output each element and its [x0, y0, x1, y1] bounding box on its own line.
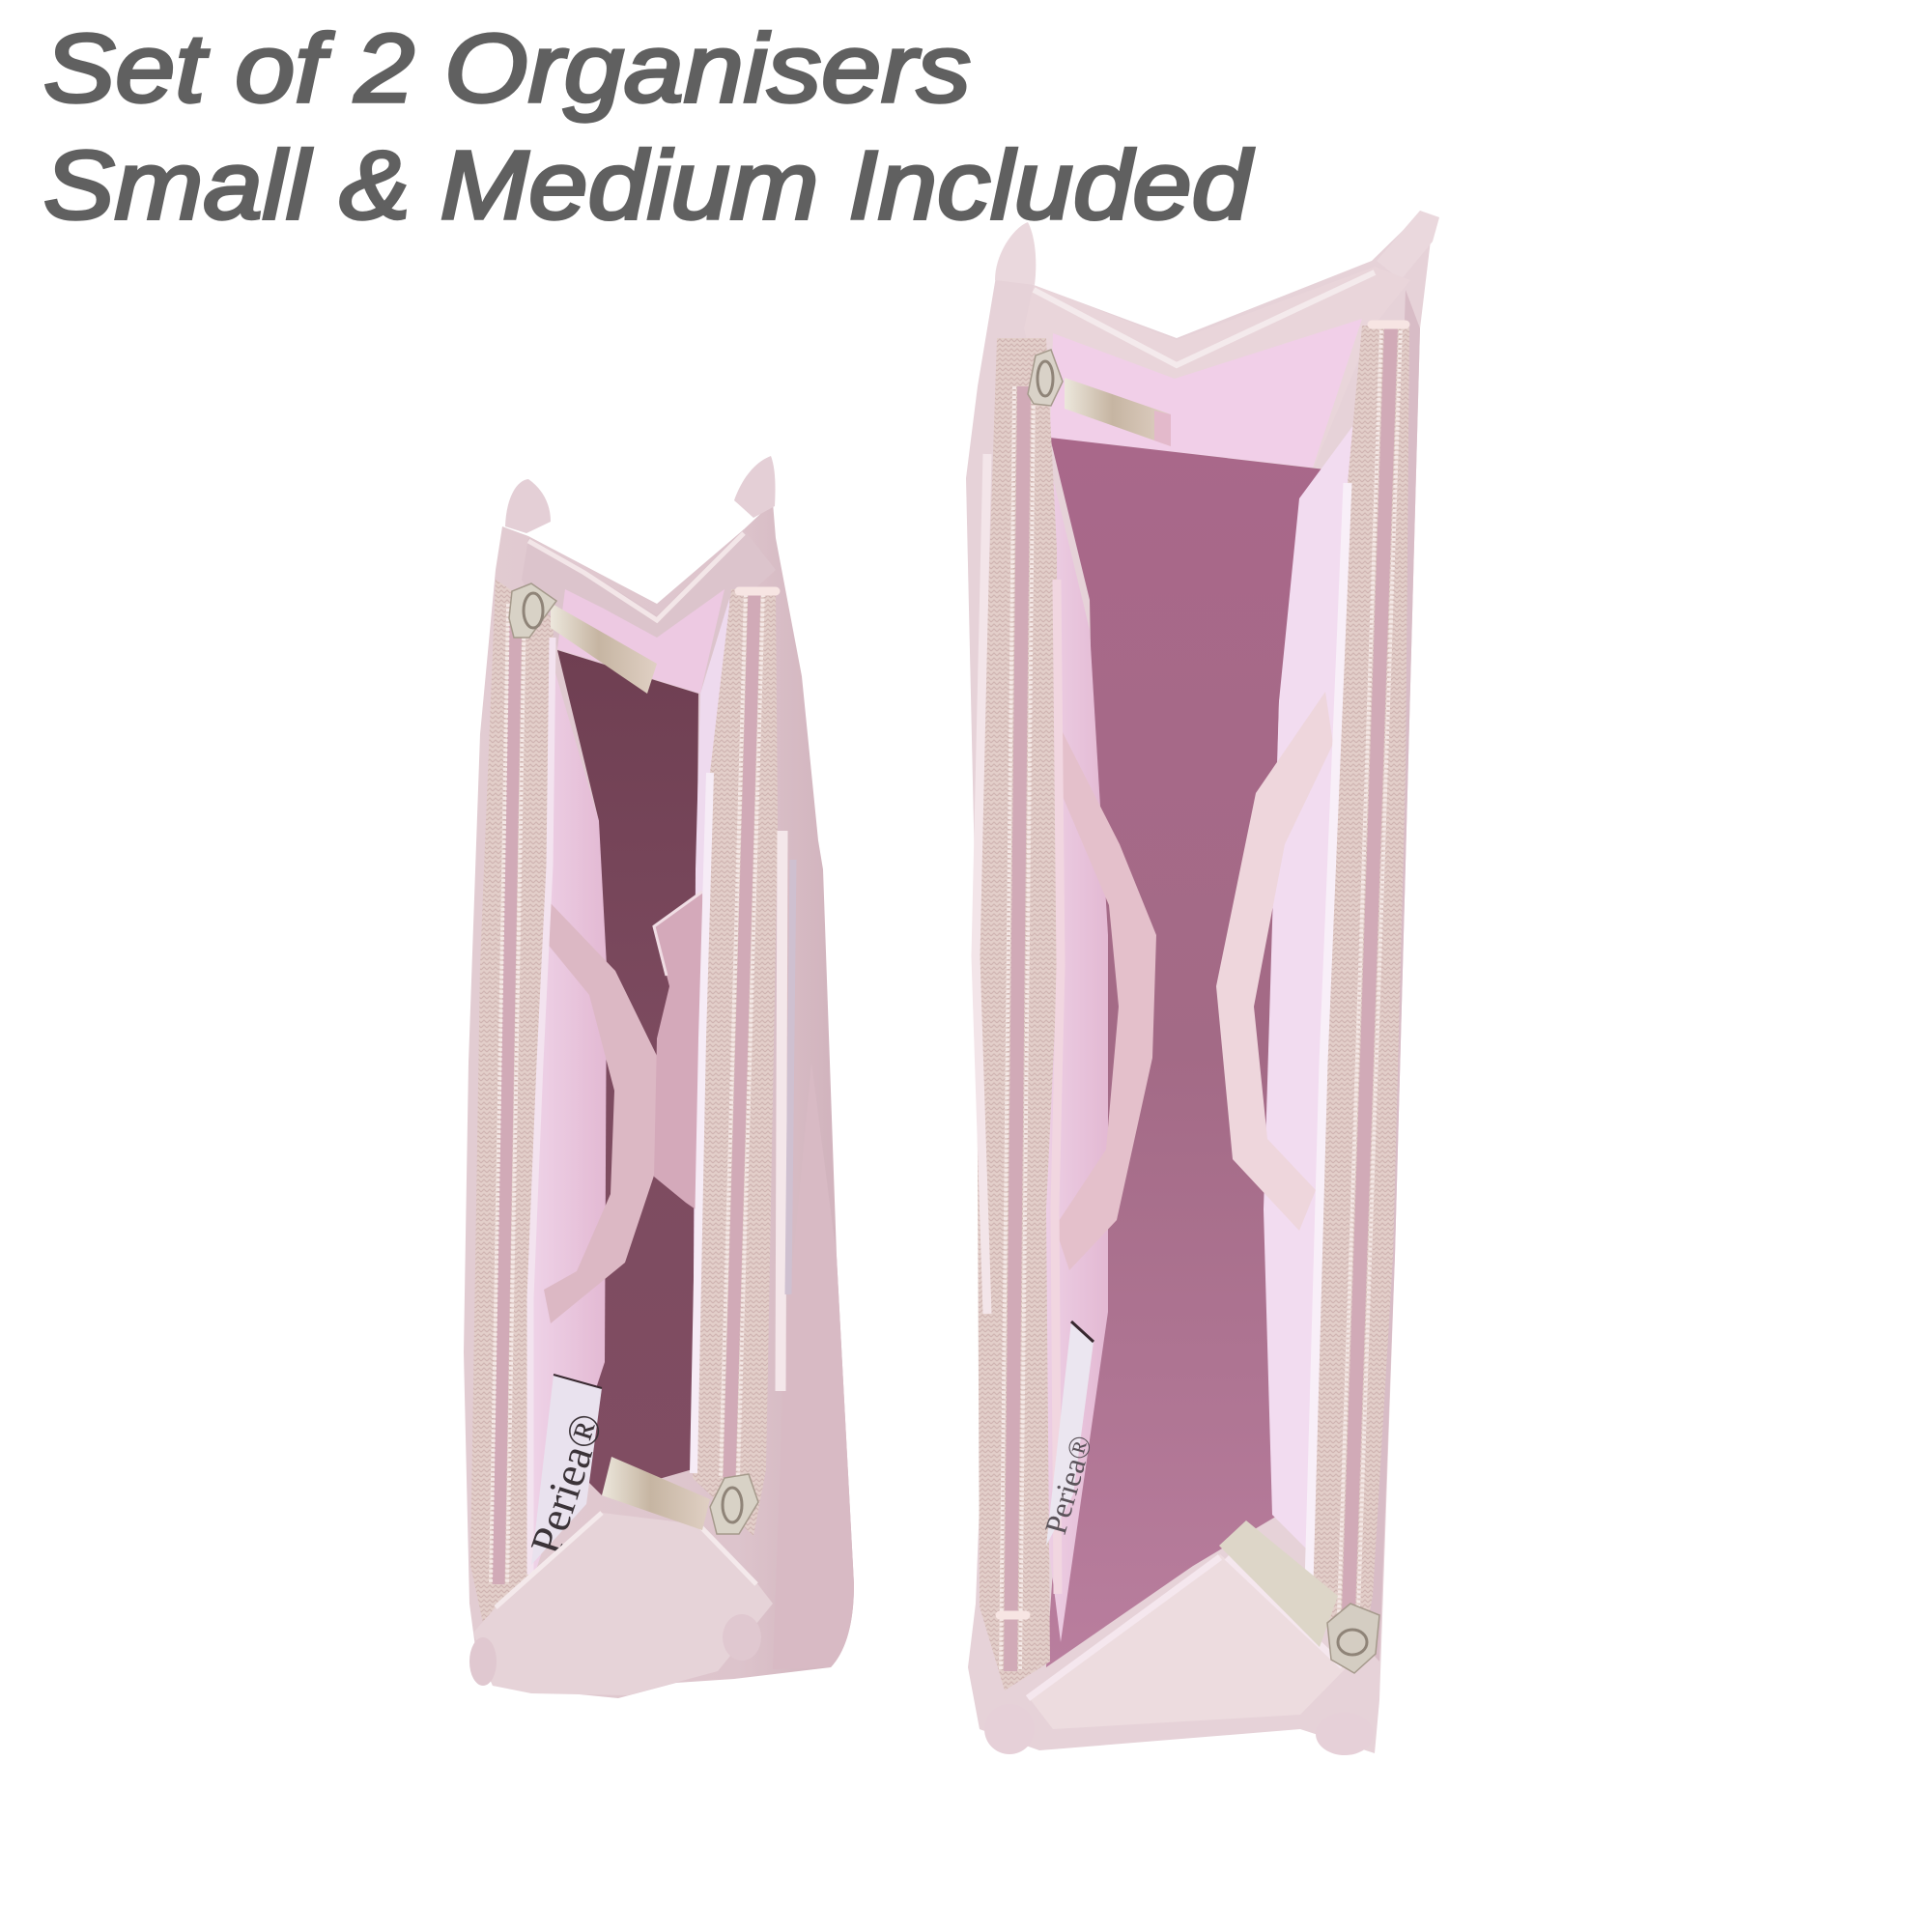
medium organiser top flap — [1024, 267, 1410, 468]
medium organiser interior — [1046, 438, 1325, 1667]
medium organiser right zipper — [1309, 325, 1409, 1652]
small organiser left zipper — [470, 580, 554, 1623]
medium organiser right handle — [1216, 692, 1333, 1231]
small organiser top zip pull — [509, 583, 657, 694]
small organiser — [464, 456, 854, 1698]
small organiser top corner posts — [505, 456, 776, 533]
small organiser interior — [555, 650, 698, 1495]
medium organiser bottom posts — [984, 1704, 1374, 1755]
medium organiser bottom zip pull — [1219, 1520, 1379, 1673]
small organiser right lining — [693, 599, 734, 1478]
medium organiser left piping — [976, 454, 987, 1314]
title: Set of 2 Organisers — [43, 14, 971, 123]
small organiser outer shell — [464, 502, 854, 1698]
small organiser right flap — [654, 892, 707, 1211]
medium organiser outer shell — [966, 224, 1433, 1753]
title: Small & Medium Included — [43, 131, 1255, 240]
small organiser right zipper — [693, 589, 778, 1536]
small organiser top flap — [522, 529, 776, 692]
medium organiser label: Periea® — [1037, 1432, 1098, 1538]
small organiser side pleat — [773, 1063, 854, 1669]
small organiser left handle — [544, 903, 663, 1323]
medium organiser label — [1037, 1321, 1098, 1546]
small organiser right piping — [781, 831, 793, 1391]
small organiser bottom zip pull — [602, 1457, 758, 1534]
medium organiser left lining — [1024, 478, 1108, 1642]
medium organiser left zipper — [977, 338, 1061, 1690]
medium organiser bottom flap — [1028, 1554, 1348, 1729]
medium organiser side panel — [1362, 290, 1420, 1662]
medium organiser top corner posts — [995, 211, 1439, 285]
medium organiser left handle — [1055, 732, 1156, 1270]
medium organiser — [966, 211, 1439, 1755]
medium organiser top zip pull — [1028, 350, 1171, 446]
small organiser bottom flap — [473, 1513, 773, 1695]
small organiser label: Periea® — [521, 1407, 612, 1560]
small organiser left lining — [522, 650, 607, 1584]
medium organiser right lining — [1264, 417, 1359, 1555]
title — [43, 14, 1255, 240]
small organiser bottom posts — [469, 1614, 761, 1686]
